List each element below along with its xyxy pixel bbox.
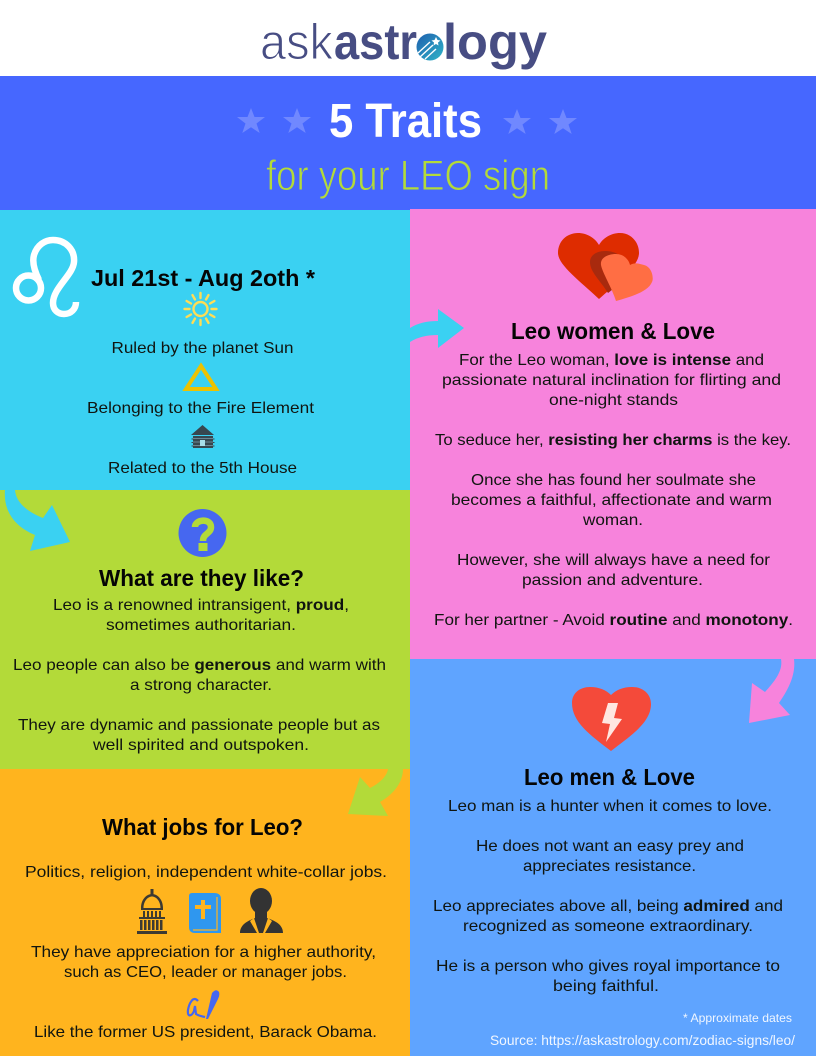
footnote: * Approximate dates	[683, 1011, 792, 1025]
text block: To seduce her, resisting her charms is the key.	[435, 432, 791, 449]
obama text: Like the former US president, Barack Obama.	[34, 1024, 377, 1041]
panel: what jobs	[0, 769, 410, 1056]
icon: capitol	[137, 889, 167, 934]
text block: For her partner - Avoid routine and monotony .	[434, 612, 793, 629]
icon: leo symbol	[16, 240, 76, 314]
icon: businessman	[240, 888, 283, 933]
text block: Leo man is a hunter when it comes to love.	[448, 798, 772, 815]
text block: being faithful.	[553, 978, 659, 995]
text block: sometimes authoritarian.	[106, 617, 296, 634]
heading: Leo men & Love	[524, 764, 695, 790]
text block: For the Leo woman, love is intense and	[459, 352, 764, 369]
text block	[13, 597, 386, 754]
stars left	[237, 108, 311, 133]
heading: Leo women & Love	[511, 318, 715, 344]
house text: Related to the 5th House	[108, 460, 297, 477]
authority text: They have appreciation for a higher authority,	[31, 944, 376, 961]
logo: logy	[443, 14, 547, 70]
text block: recognized as someone extraordinary.	[463, 918, 753, 935]
text block: They are dynamic and passionate people but as	[18, 717, 380, 734]
icon: broken heart	[572, 687, 651, 751]
icon: bible	[189, 893, 221, 933]
text block: becomes a faithful, affectionate and warm	[451, 492, 772, 509]
text block: Once she has found her soulmate she	[471, 472, 756, 489]
icon: sun	[184, 293, 216, 325]
arrow: cyan to pink	[410, 309, 464, 348]
jobs text: Politics, religion, independent white-collar jobs.	[25, 864, 387, 881]
text block: However, she will always have a need for	[457, 552, 771, 569]
subtitle: for your LEO sign	[266, 152, 550, 200]
icon: fire triangle	[186, 366, 216, 389]
stars right	[503, 109, 577, 134]
text block	[433, 798, 783, 995]
arrow: pink to blue	[749, 659, 794, 723]
text block: passionate natural inclination for flirting and	[442, 372, 781, 389]
panel: header banner	[0, 76, 816, 210]
logo: astr	[334, 14, 417, 70]
text block: one-night stands	[549, 392, 678, 409]
icon: signature pen	[188, 990, 219, 1019]
text block: woman.	[582, 512, 643, 529]
text block: well spirited and outspoken.	[92, 737, 309, 754]
icon: question mark	[178, 509, 226, 557]
text block: a strong character.	[130, 677, 272, 694]
text block: Leo is a renowned intransigent, proud,	[53, 597, 349, 614]
source: Source: https://askastrology.com/zodiac-signs/leo/	[490, 1032, 795, 1048]
title: 5 Traits	[329, 95, 482, 148]
icon: hearts	[558, 233, 653, 301]
text block	[434, 352, 793, 629]
date heading: Jul 21st - Aug 2oth *	[91, 265, 315, 291]
arrow: lime to orange	[348, 769, 403, 816]
panel: what are they like	[0, 490, 410, 769]
planet text: Ruled by the planet Sun	[112, 340, 294, 357]
text block: He is a person who gives royal importance to	[436, 958, 780, 975]
panel: leo men	[410, 659, 816, 1056]
panel: what jobs: such as CEO, leader or manager jobs.	[64, 964, 347, 981]
logo: ask	[260, 14, 334, 70]
panel: dates and rulers	[0, 210, 410, 490]
text block: appreciates resistance.	[523, 858, 696, 875]
arrow: cyan to lime	[5, 490, 70, 551]
text block: He does not want an easy prey and	[476, 838, 744, 855]
heading: What are they like?	[99, 565, 304, 591]
text block: Leo people can also be generous and warm with	[13, 657, 386, 674]
text block: Leo appreciates above all, being admired and	[433, 898, 783, 915]
icon: log cabin house	[191, 425, 214, 448]
logo	[260, 14, 547, 70]
text block: passion and adventure.	[522, 572, 703, 589]
heading: What jobs for Leo?	[102, 814, 303, 840]
panel: leo women	[410, 209, 816, 659]
element text: Belonging to the Fire Element	[87, 400, 315, 417]
